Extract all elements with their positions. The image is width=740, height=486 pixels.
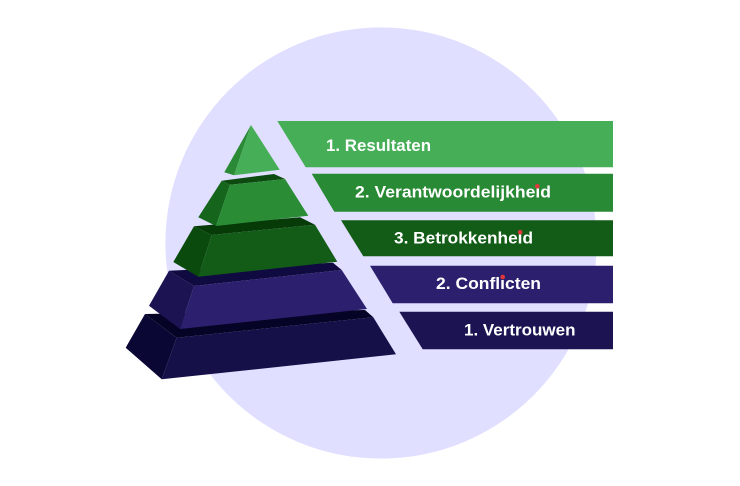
red dot bbox=[518, 230, 522, 234]
label: Betrokkenheid: 3. Betrokkenheid bbox=[394, 230, 533, 248]
pyramid bbox=[126, 125, 396, 379]
label: Conflicten: 2. Conflicten bbox=[436, 275, 541, 293]
bar: Verantwoordelijkheid bbox=[312, 174, 613, 212]
red dot bbox=[500, 275, 505, 279]
label: Verantwoordelijkheid: 2. Verantwoordelijkheid bbox=[355, 184, 551, 202]
bar: Vertrouwen bbox=[399, 312, 613, 349]
label: Resultaten: 1. Resultaten bbox=[326, 137, 431, 155]
red dot bbox=[535, 184, 540, 189]
bar: Conflicten bbox=[370, 266, 613, 303]
tier 5: base bbox=[126, 310, 396, 379]
tier 1: apex bbox=[224, 125, 280, 175]
bar: Betrokkenheid bbox=[341, 220, 613, 256]
tier 2 bbox=[198, 174, 308, 226]
tier 3 bbox=[173, 217, 337, 277]
tier 4 bbox=[149, 263, 367, 329]
bar: Resultaten bbox=[277, 121, 613, 167]
label: Vertrouwen: 1. Vertrouwen bbox=[464, 322, 576, 340]
background circle bbox=[165, 27, 597, 459]
